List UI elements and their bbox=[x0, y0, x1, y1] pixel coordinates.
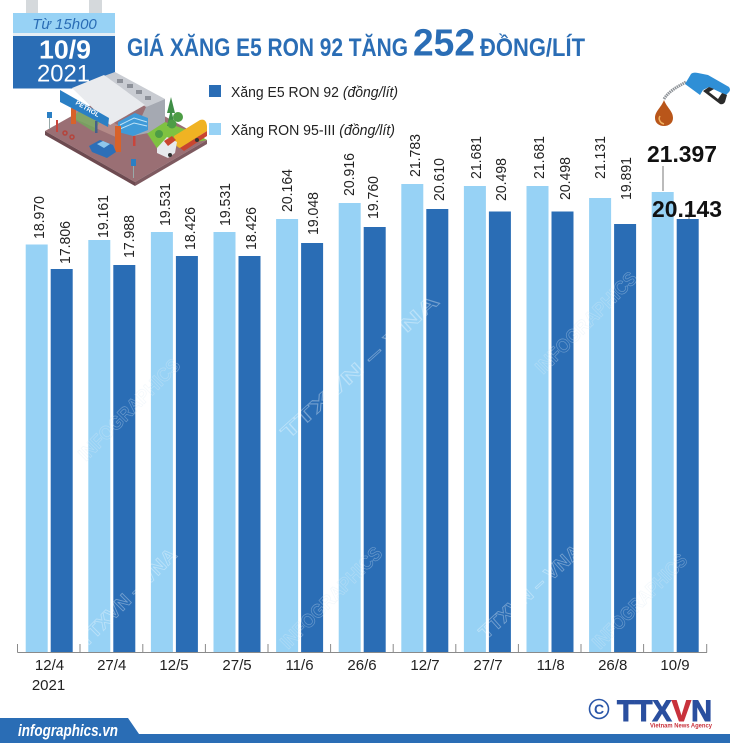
group: 12/4: 12/4 bbox=[35, 657, 64, 674]
group: 27/5: 27/5 bbox=[222, 657, 252, 674]
group: 26/6: 20.916 bbox=[341, 153, 358, 196]
group: 26/8: 26/8 bbox=[598, 657, 627, 674]
title: ĐỒNG/LÍT bbox=[480, 32, 585, 62]
group: 26/6: 26/6 bbox=[347, 657, 377, 674]
group: 27/7: 20.498 bbox=[493, 158, 510, 201]
group: 11/8: 20.498 bbox=[557, 157, 574, 200]
group: 27/4: 17.988 bbox=[121, 215, 138, 258]
illustration: petrol station: PETROL bbox=[74, 100, 100, 119]
group: 12/4: 17.806 bbox=[57, 221, 74, 264]
group: 26/6: 19.760 bbox=[365, 176, 382, 219]
calendar date badge: 10/9 bbox=[39, 34, 91, 64]
watermarks: INFOGRAPHICS bbox=[277, 543, 387, 654]
group: 12/5: 19.531 bbox=[157, 183, 174, 226]
group: 11/6 bbox=[276, 169, 323, 674]
group: 10/9: 10/9 bbox=[660, 657, 690, 674]
watermarks: TTXVN – VNA bbox=[277, 291, 444, 444]
group: 27/4: 27/4 bbox=[97, 657, 126, 674]
icon: fuel nozzle with oil drop bbox=[655, 73, 730, 126]
group: 12/4: 18.970 bbox=[31, 196, 48, 239]
group: 27/7 bbox=[464, 136, 511, 674]
axis bbox=[18, 644, 707, 652]
group: 10/9: 20.143 bbox=[652, 196, 722, 222]
legend: Xăng RON 95-III (đồng/lít) bbox=[231, 123, 395, 139]
calendar date badge: 2021 bbox=[37, 60, 90, 88]
watermarks: INFOGRAPHICS bbox=[532, 268, 642, 379]
group: 26/8: 21.131 bbox=[592, 136, 609, 179]
watermarks: TTXVN – VNA bbox=[75, 545, 182, 652]
illustration: petrol station bbox=[45, 72, 207, 186]
group: 11/8 bbox=[526, 136, 574, 674]
watermarks: TTXVN – VNA bbox=[475, 541, 586, 644]
group: 12/4 bbox=[26, 196, 74, 694]
group: 12/5: 12/5 bbox=[159, 657, 189, 674]
group: 10/9: 21.397 bbox=[647, 141, 717, 167]
group: 11/6: 19.048 bbox=[305, 192, 322, 235]
group: 11/6: 20.164 bbox=[279, 169, 296, 212]
logo: TTXVN: TTXVN bbox=[617, 695, 712, 728]
group: 26/8 bbox=[589, 136, 636, 674]
group: 27/4: 19.161 bbox=[95, 195, 112, 238]
logo: TTXVN: C bbox=[594, 701, 604, 717]
group: 12/7: 21.783 bbox=[407, 134, 424, 177]
group: 27/7: 27/7 bbox=[473, 657, 503, 674]
group: 27/7: 21.681 bbox=[468, 136, 485, 179]
watermarks bbox=[75, 268, 692, 654]
group: 11/6: 11/6 bbox=[285, 657, 314, 674]
group: 11/8: 21.681 bbox=[531, 136, 548, 179]
group: 12/5: 18.426 bbox=[182, 207, 199, 250]
footer band bbox=[0, 718, 730, 743]
logo: TTXVN: Vietnam News Agency bbox=[650, 724, 713, 730]
footer band: infographics.vn bbox=[18, 722, 118, 740]
group: 12/4: 2021 bbox=[32, 677, 65, 694]
calendar date badge bbox=[13, 0, 115, 88]
group: 26/6 bbox=[339, 153, 386, 674]
group: 27/5 bbox=[214, 183, 260, 674]
group: 12/7 bbox=[401, 134, 448, 674]
group: 12/7: 20.610 bbox=[431, 158, 448, 201]
group: 26/8: 19.891 bbox=[618, 157, 635, 200]
group: 12/5 bbox=[151, 183, 199, 674]
title bbox=[127, 22, 585, 64]
title: GIÁ XĂNG E5 RON 92 TĂNG bbox=[127, 33, 408, 62]
legend bbox=[209, 85, 398, 139]
group: 27/5: 19.531 bbox=[217, 183, 234, 226]
bar chart bbox=[18, 134, 722, 694]
group: 10/9 bbox=[647, 141, 722, 674]
watermarks: INFOGRAPHICS bbox=[75, 355, 185, 466]
calendar date badge: Từ 15h00 bbox=[32, 16, 97, 33]
group: 12/7: 12/7 bbox=[410, 657, 440, 674]
watermarks: INFOGRAPHICS bbox=[589, 550, 692, 654]
title: 252 bbox=[413, 22, 475, 64]
legend: Xăng E5 RON 92 (đồng/lít) bbox=[231, 85, 398, 101]
group: 27/4 bbox=[88, 195, 138, 674]
group: 27/5: 18.426 bbox=[243, 207, 260, 250]
group: 11/8: 11/8 bbox=[537, 657, 565, 674]
